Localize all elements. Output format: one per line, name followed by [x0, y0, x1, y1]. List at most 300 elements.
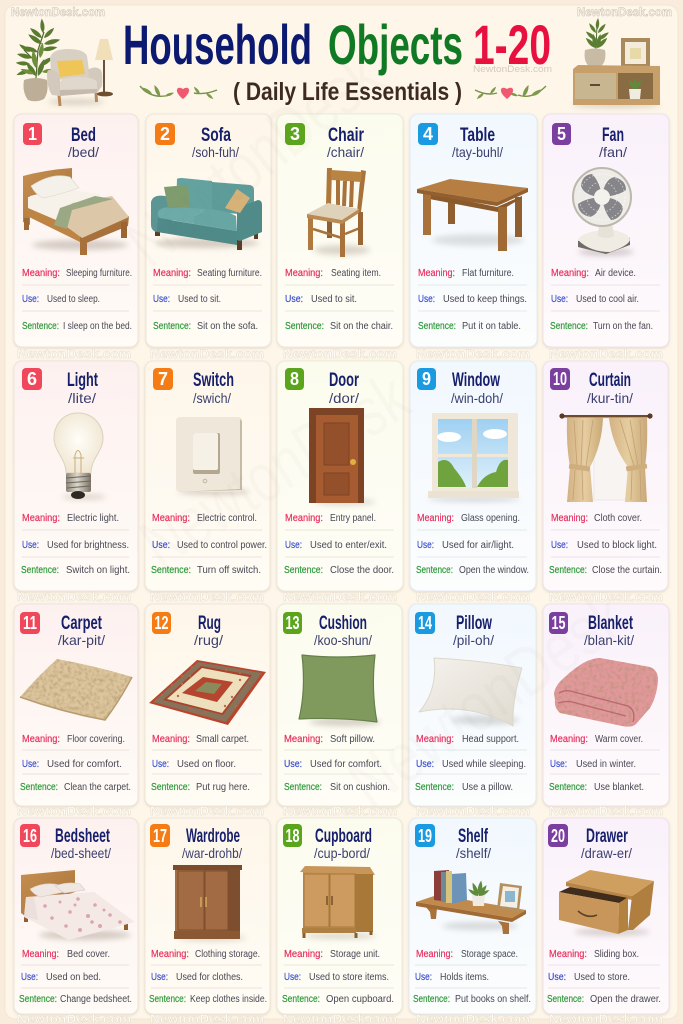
icon: open drawer — [559, 870, 654, 936]
sentence row: I sleep on the bed. — [63, 321, 132, 332]
number badge 7 — [153, 368, 173, 390]
card 6: Light — [14, 361, 138, 591]
sentence row — [549, 782, 644, 793]
use row — [22, 294, 100, 305]
meaning row: Clothing storage. — [195, 949, 260, 960]
meaning row: Seating item. — [331, 268, 381, 279]
sentence row: Sentence: — [19, 994, 57, 1005]
meaning row: Meaning: — [549, 949, 587, 960]
title: Cupboard — [315, 825, 372, 847]
sentence row: Sentence: — [418, 321, 456, 332]
title: Pillow — [456, 612, 493, 634]
icon: curtain — [559, 413, 653, 502]
watermark row 2-3 gap: NewtonDesk.com — [549, 590, 663, 604]
sentence row: Sentence: — [20, 782, 58, 793]
number badge 2: 2 — [160, 124, 170, 144]
title: Rug — [198, 612, 221, 634]
icon: potted plant left — [15, 18, 61, 101]
number badge 2 — [155, 123, 175, 145]
subtitle: ( Daily Life Essentials ) — [233, 78, 462, 106]
sentence row: Sentence: — [151, 782, 190, 793]
use row: Used to block light. — [577, 540, 657, 551]
use row: Use: — [284, 759, 302, 770]
pronunciation: /war-drohb/ — [182, 845, 242, 861]
watermark top right: NewtonDesk.com — [577, 5, 672, 19]
sentence row: Change bedsheet. — [60, 994, 132, 1005]
title: Shelf — [458, 825, 488, 847]
pronunciation: /rug/ — [194, 632, 223, 648]
title: Fan — [602, 124, 624, 146]
meaning row — [152, 734, 249, 745]
meaning row: Meaning: — [551, 513, 588, 524]
use row — [21, 972, 101, 983]
number badge 5: 5 — [557, 124, 566, 144]
use row — [548, 972, 630, 983]
pronunciation: /cup-bord/ — [314, 845, 370, 861]
meaning row — [22, 268, 132, 279]
meaning row: Warm cover. — [595, 734, 643, 745]
icon: bedsheet on bed — [21, 870, 135, 940]
number badge 16: 16 — [23, 826, 37, 846]
use row: Use: — [22, 294, 39, 305]
sentence row: Open the drawer. — [590, 994, 661, 1005]
meaning row: Electric light. — [67, 513, 119, 524]
meaning row: Floor covering. — [67, 734, 125, 745]
pronunciation: /draw-er/ — [581, 845, 632, 861]
meaning row: Flat furniture. — [462, 268, 514, 279]
use row — [551, 294, 639, 305]
number badge 4: 4 — [423, 124, 433, 144]
card 15: Blanket — [543, 604, 669, 806]
sentence row: Close the door. — [330, 565, 394, 576]
sentence row: Close the curtain. — [592, 565, 662, 576]
number badge 6 — [22, 368, 42, 390]
watermark row 3-4 gap: NewtonDesk.com — [150, 804, 264, 818]
use row: Used for comfort. — [47, 759, 122, 770]
meaning row: Electric control. — [197, 513, 257, 524]
card 19: Shelf — [409, 818, 536, 1014]
number badge 20 — [548, 824, 568, 847]
use row: Used while sleeping. — [442, 759, 526, 770]
number badge 15: 15 — [552, 613, 566, 633]
card background — [277, 361, 403, 591]
meaning row: Meaning: — [285, 513, 323, 524]
sentence row: Sentence: — [149, 994, 186, 1005]
meaning row: Meaning: — [22, 268, 60, 279]
sentence row — [416, 565, 529, 576]
watermark row 3-4 gap: NewtonDesk.com — [283, 804, 397, 818]
meaning row: Meaning: — [285, 268, 323, 279]
card background — [14, 604, 138, 806]
pronunciation: /kar-pit/ — [58, 632, 105, 648]
ornament left — [140, 84, 217, 100]
use row: Use: — [21, 972, 38, 983]
sentence row — [149, 994, 267, 1005]
meaning row: Entry panel. — [330, 513, 376, 524]
number badge 9 — [417, 368, 436, 390]
watermark row 2-3 gap: NewtonDesk.com — [416, 590, 530, 604]
card background — [543, 604, 669, 806]
sentence row: Sentence: — [549, 565, 587, 576]
sentence row — [418, 321, 521, 332]
meaning row: Meaning: — [416, 734, 454, 745]
card 18: Cupboard — [277, 818, 402, 1014]
meaning row — [151, 949, 260, 960]
icon: shelf with books — [416, 870, 526, 934]
icon: bed — [23, 168, 129, 255]
meaning row: Small carpet. — [196, 734, 249, 745]
ornament right — [475, 84, 546, 100]
card background — [409, 818, 536, 1014]
sentence row: Sentence: — [550, 321, 588, 332]
card 8: Door — [277, 361, 403, 591]
use row: Used on floor. — [177, 759, 236, 770]
number badge 11: 11 — [23, 613, 37, 633]
use row: Use: — [285, 540, 302, 551]
icon: floor lamp — [95, 39, 113, 96]
meaning row: Storage unit. — [330, 949, 380, 960]
title: Objects — [328, 13, 463, 76]
number badge 10: 10 — [553, 369, 567, 389]
icon: carpet — [20, 659, 132, 720]
meaning row: Cloth cover. — [594, 513, 642, 524]
pronunciation: /dor/ — [329, 390, 359, 406]
use row: Used to sit. — [311, 294, 357, 305]
card 20: Drawer — [543, 818, 669, 1014]
sentence row: Clean the carpet. — [64, 782, 131, 793]
meaning row — [152, 513, 257, 524]
meaning row: Sliding box. — [594, 949, 639, 960]
use row: Use: — [152, 759, 169, 770]
sentence row: Sentence: — [22, 321, 59, 332]
watermark row 3-4 gap — [17, 804, 663, 818]
use row: Use: — [415, 972, 432, 983]
use row: Use: — [151, 972, 168, 983]
title: Drawer — [586, 825, 628, 847]
meaning row — [285, 513, 376, 524]
pronunciation: /tay-buhl/ — [452, 144, 503, 160]
sentence row: Keep clothes inside. — [190, 994, 267, 1005]
sentence row — [151, 565, 261, 576]
pronunciation: /blan-kit/ — [584, 632, 634, 648]
card 13: Cushion — [277, 604, 402, 806]
use row — [550, 759, 636, 770]
card 17: Wardrobe — [145, 818, 270, 1014]
sentence row: Sentence: — [416, 565, 453, 576]
use row — [153, 294, 221, 305]
sentence row: Sentence: — [21, 565, 59, 576]
use row: Used to enter/exit. — [310, 540, 387, 551]
sentence row: Put books on shelf. — [455, 994, 531, 1005]
meaning row: Meaning: — [284, 734, 323, 745]
sentence row: Sit on the chair. — [330, 321, 393, 332]
number badge 5 — [552, 123, 571, 145]
title — [123, 13, 551, 76]
use row — [151, 972, 243, 983]
meaning row: Bed cover. — [67, 949, 110, 960]
use row: Use: — [417, 540, 434, 551]
meaning row: Storage space. — [461, 949, 518, 960]
sentence row: Sit on the sofa. — [197, 321, 258, 332]
card background — [277, 604, 402, 806]
number badge 19: 19 — [418, 826, 432, 846]
number badge 17 — [150, 824, 170, 847]
card 16: Bedsheet — [14, 818, 138, 1014]
card 12: Rug — [145, 604, 270, 806]
watermark row 1-2 gap: NewtonDesk.com — [17, 347, 131, 361]
meaning row: Sleeping furniture. — [66, 268, 132, 279]
title: Table — [460, 124, 495, 146]
meaning row — [549, 949, 639, 960]
title: Blanket — [588, 612, 633, 634]
use row: Use: — [153, 294, 170, 305]
sentence row: Sentence: — [284, 782, 322, 793]
card 14: Pillow — [409, 604, 536, 806]
card 10: Curtain — [543, 361, 668, 591]
pronunciation: /chair/ — [327, 144, 364, 160]
sentence row — [151, 782, 250, 793]
card background — [277, 818, 402, 1014]
pronunciation: /pil-oh/ — [453, 632, 494, 648]
number badge 20: 20 — [551, 826, 565, 846]
title: Curtain — [589, 369, 631, 391]
meaning row — [551, 513, 642, 524]
icon: wardrobe — [173, 865, 246, 941]
use row: Use: — [551, 294, 568, 305]
card 11: Carpet — [14, 604, 138, 806]
title: Bedsheet — [55, 825, 110, 847]
sentence row: Turn off switch. — [197, 565, 261, 576]
meaning row: Meaning: — [22, 734, 60, 745]
icon: cushion — [299, 655, 381, 726]
icon: cabinet — [572, 65, 660, 108]
sentence row: Sit on cushion. — [330, 782, 390, 793]
meaning row — [285, 268, 381, 279]
sentence row: Sentence: — [413, 994, 450, 1005]
sentence row — [153, 321, 258, 332]
meaning row: Meaning: — [550, 734, 588, 745]
card 2: Sofa — [146, 114, 271, 347]
use row: Use: — [22, 759, 39, 770]
use row — [415, 972, 489, 983]
watermark row 1-2 gap: NewtonDesk.com — [549, 347, 663, 361]
small site credit: NewtonDesk.com — [473, 64, 552, 75]
watermark row 3-4 gap: NewtonDesk.com — [549, 804, 663, 818]
title: Light — [67, 369, 98, 391]
meaning row: Meaning: — [153, 268, 191, 279]
meaning row — [550, 734, 643, 745]
card 5: Fan — [543, 114, 669, 347]
number badge 13: 13 — [286, 613, 300, 633]
meaning row — [22, 513, 119, 524]
sentence row: Sentence: — [285, 321, 324, 332]
use row: Use: — [418, 294, 435, 305]
number badge 1 — [23, 123, 42, 145]
card background — [14, 361, 138, 591]
meaning row: Head support. — [462, 734, 519, 745]
card 1: Bed — [14, 114, 138, 347]
use row: Used to store items. — [309, 972, 389, 983]
meaning row: Meaning: — [416, 949, 453, 960]
use row: Use: — [416, 759, 434, 770]
sentence row: Use a pillow. — [462, 782, 513, 793]
pronunciation: /fan/ — [599, 144, 627, 160]
sentence row: Put it on table. — [462, 321, 521, 332]
icon: potted plant right — [584, 18, 610, 67]
sentence row — [282, 994, 394, 1005]
sentence row: Open cupboard. — [326, 994, 394, 1005]
sentence row: Put rug here. — [196, 782, 250, 793]
card background — [14, 114, 138, 347]
number badge 17: 17 — [153, 826, 167, 846]
use row: Use: — [551, 540, 568, 551]
card background — [410, 361, 536, 591]
icon: wall switch — [176, 417, 250, 495]
number badge 18: 18 — [286, 826, 300, 846]
number badge 14: 14 — [418, 613, 432, 633]
icon: pillow — [419, 658, 522, 726]
number badge 12: 12 — [154, 613, 168, 633]
meaning row: Meaning: — [418, 268, 455, 279]
use row: Use: — [550, 759, 567, 770]
icon: door — [309, 408, 375, 505]
meaning row: Meaning: — [417, 513, 454, 524]
sentence row: Sentence: — [547, 994, 584, 1005]
meaning row: Meaning: — [551, 268, 589, 279]
card background — [409, 604, 536, 806]
watermark row 2-3 gap: NewtonDesk.com — [150, 590, 264, 604]
meaning row: Meaning: — [151, 949, 189, 960]
use row: Used in winter. — [576, 759, 636, 770]
use row: Used for air/light. — [442, 540, 514, 551]
sentence row — [550, 321, 653, 332]
icon: chair — [307, 168, 370, 257]
use row: Use: — [285, 294, 303, 305]
watermark row 1-2 gap — [17, 347, 663, 361]
pronunciation: /bed-sheet/ — [51, 845, 111, 861]
sentence row: Sentence: — [151, 565, 191, 576]
title: Carpet — [61, 612, 102, 634]
number badge 12 — [152, 612, 171, 634]
number badge 8 — [285, 368, 304, 390]
card background — [277, 114, 403, 347]
pronunciation: /swich/ — [193, 390, 231, 406]
card 9: Window — [410, 361, 536, 591]
card background — [543, 114, 669, 347]
use row: Used for brightness. — [47, 540, 129, 551]
meaning row: Meaning: — [22, 949, 59, 960]
card background — [145, 361, 270, 591]
sentence row — [413, 994, 531, 1005]
sentence row — [285, 321, 393, 332]
number badge 9: 9 — [422, 369, 431, 389]
sentence row: Sentence: — [549, 782, 587, 793]
number badge 6: 6 — [27, 369, 37, 389]
card 3: Chair — [277, 114, 403, 347]
icon: rug — [149, 660, 266, 725]
header — [11, 5, 672, 108]
title: Bed — [71, 124, 96, 146]
watermark bottom — [17, 1012, 663, 1024]
title: Chair — [328, 124, 364, 146]
meaning row — [284, 949, 380, 960]
pronunciation: /win-doh/ — [451, 390, 503, 406]
meaning row: Soft pillow. — [330, 734, 375, 745]
title: Cushion — [319, 612, 367, 634]
meaning row — [22, 734, 125, 745]
sentence row: Sentence: — [284, 565, 323, 576]
number badge 10 — [550, 368, 570, 390]
watermark row 2-3 gap: NewtonDesk.com — [283, 590, 397, 604]
number badge 3 — [285, 123, 305, 145]
meaning row — [22, 949, 110, 960]
number badge 8: 8 — [290, 369, 299, 389]
use row: Holds items. — [440, 972, 489, 983]
meaning row — [153, 268, 262, 279]
number badge 3: 3 — [290, 124, 300, 144]
sentence row: Switch on light. — [66, 565, 130, 576]
card background — [146, 114, 271, 347]
watermark row 2-3 gap — [17, 590, 663, 604]
use row: Use: — [548, 972, 566, 983]
use row: Used to sleep. — [47, 294, 100, 305]
icon: armchair — [47, 49, 104, 106]
icon: fan — [573, 168, 634, 256]
meaning row — [551, 268, 636, 279]
diagonal watermarks — [111, 35, 641, 822]
icon: window — [428, 413, 520, 502]
sentence row: Sentence: — [415, 782, 454, 793]
sentence row — [21, 565, 130, 576]
icon: table — [417, 179, 528, 251]
use row: Used for comfort. — [310, 759, 382, 770]
watermark row 1-2 gap: NewtonDesk.com — [150, 347, 264, 361]
watermark row 3-4 gap: NewtonDesk.com — [17, 804, 131, 818]
sentence row — [549, 565, 662, 576]
meaning row — [416, 949, 518, 960]
meaning row: Meaning: — [22, 513, 60, 524]
pronunciation: /shelf/ — [456, 845, 491, 861]
title: Window — [452, 369, 501, 391]
use row — [285, 294, 357, 305]
sentence row: Sentence: — [282, 994, 320, 1005]
diagonal watermarks: NewtonDesk — [127, 357, 423, 583]
meaning row — [418, 268, 514, 279]
meaning row — [416, 734, 519, 745]
number badge 18 — [283, 824, 302, 847]
use row: Used to sit. — [178, 294, 221, 305]
use row: Use: — [284, 972, 301, 983]
sentence row — [284, 565, 394, 576]
icon: sofa — [151, 178, 262, 250]
use row: Used for clothes. — [176, 972, 243, 983]
meaning row: Meaning: — [152, 734, 190, 745]
number badge 14 — [415, 612, 435, 634]
watermark row 3-4 gap: NewtonDesk.com — [416, 804, 530, 818]
sentence row: Sentence: — [153, 321, 191, 332]
card background — [543, 361, 668, 591]
title: Switch — [193, 369, 234, 391]
watermark row 2-3 gap: NewtonDesk.com — [17, 590, 131, 604]
pronunciation: /kur-tin/ — [587, 390, 633, 406]
watermark row 1-2 gap: NewtonDesk.com — [416, 347, 530, 361]
card background — [410, 114, 537, 347]
pronunciation: /lite/ — [68, 390, 96, 406]
card background — [145, 818, 270, 1014]
meaning row: Seating furniture. — [197, 268, 262, 279]
meaning row: Meaning: — [284, 949, 323, 960]
title: Wardrobe — [186, 825, 240, 847]
